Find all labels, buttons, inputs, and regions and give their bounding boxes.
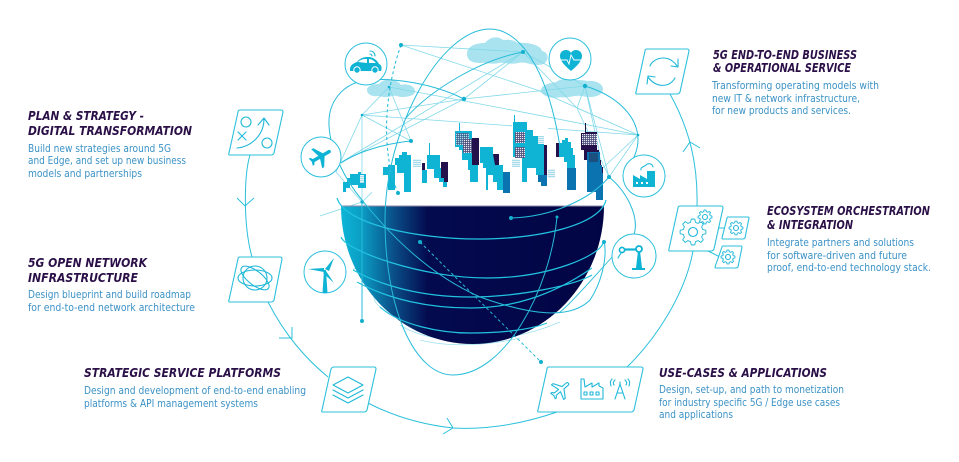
text: 5G end-to-end business: & OPERATIONAL SERVICE [713,61,852,75]
icon: connected car [345,43,387,85]
city white backdrop [372,118,586,206]
text: plan and strategy: and Edge, and set up new business [28,155,186,167]
text: strategic service platforms: platforms & API management systems [84,398,258,410]
text: ecosystem orchestration [767,204,931,274]
icon box: cycle [636,49,689,94]
text: use-cases and applications: USE-CASES & APPLICATIONS [659,366,827,380]
text: plan and strategy: PLAN & STRATEGY - [28,109,144,123]
text: plan and strategy: DIGITAL TRANSFORMATION [28,124,192,138]
text: strategic service platforms: Design and development of end-to-end enabling [84,385,306,397]
text: use-cases and applications: for industry specific 5G / Edge use cases [659,397,840,409]
text: 5G open network infrastructure: for end-to-end network architecture [28,302,195,314]
icon: wind turbine circle [304,251,346,293]
orbit arcs [329,29,638,375]
icon box: stacked layers [322,367,376,412]
text: ecosystem orchestration: for software-driven and future [767,250,907,262]
text: plan and strategy: Build new strategies around 5G [28,143,171,155]
text: use-cases and applications: and applications [659,409,733,421]
text: 5G end-to-end business: for new products and services. [712,105,851,117]
text: ecosystem orchestration: proof, end-to-end technology stack. [767,262,931,274]
text: use-cases and applications: Design, set-up, and path to monetization [659,384,844,396]
text: ecosystem orchestration: Integrate partners and solutions [767,237,914,249]
icon: health heart [549,38,591,80]
text: 5G open network infrastructure: INFRASTRUCTURE [28,271,139,285]
text: 5G end-to-end business: new IT & network infrastructure, [712,93,860,105]
text: strategic service platforms [84,366,306,410]
text: plan and strategy [28,109,192,180]
dashed connectors [387,45,541,362]
text: 5G open network infrastructure: 5G OPEN NETWORK [28,256,149,270]
globe hemisphere [341,206,604,344]
clouds [367,37,603,98]
icon box: use-cases [538,367,643,412]
text: 5G open network infrastructure: Design blueprint and build roadmap [28,289,191,301]
flow arrows [237,94,700,434]
text: 5G end-to-end business: Transforming operating models with [711,80,879,92]
text: 5G end-to-end business [711,48,879,117]
globe rings [337,198,606,333]
text: strategic service platforms: STRATEGIC SERVICE PLATFORMS [84,366,281,380]
text: plan and strategy: models and partnerships [28,168,142,180]
icon box: strategy [229,110,283,155]
text: 5G open network infrastructure [28,256,195,314]
icon box: orchestration gears [669,206,749,268]
icon box: network globe [229,257,282,302]
network web [320,45,638,345]
icon: robot arm circle [612,234,656,278]
network nodes [360,43,639,364]
text: 5G end-to-end business: 5G END-TO-END BUSINESS [713,48,857,62]
text: ecosystem orchestration: & INTEGRATION [767,218,853,232]
icon: airplane circle [301,137,341,177]
city skyline [343,115,603,200]
icon: factory circle [623,155,665,197]
text: use-cases and applications [659,366,844,421]
